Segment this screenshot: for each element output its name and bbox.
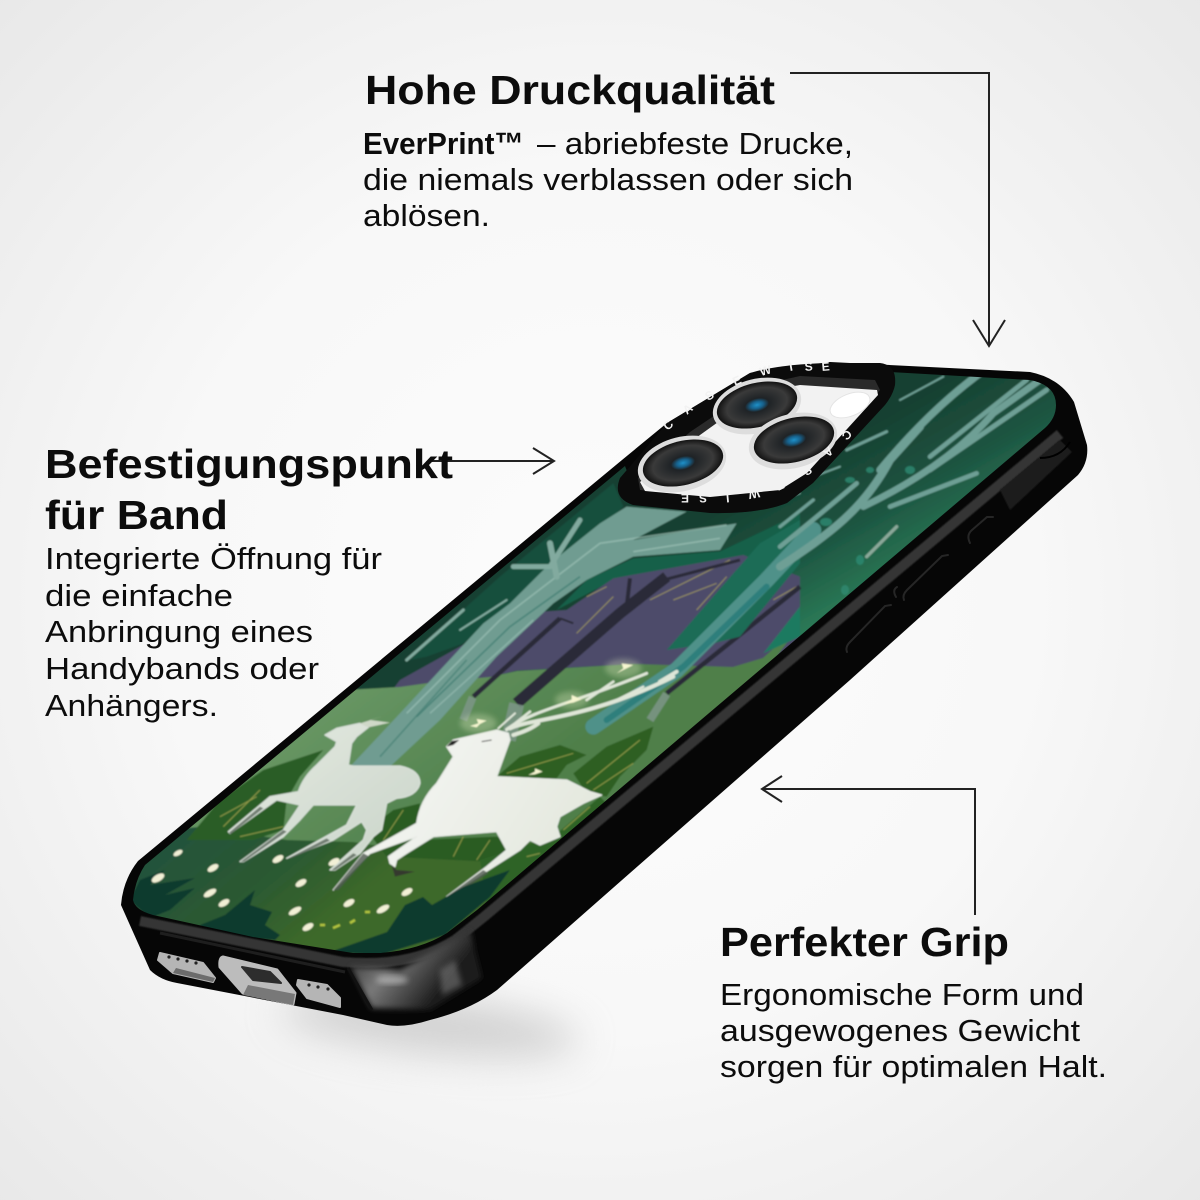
glowing sparkles <box>460 659 642 775</box>
small left branches <box>407 520 580 660</box>
camera white plate <box>640 385 878 497</box>
text: strap attachment description <box>45 541 382 723</box>
heading: strap attachment: Befestigungspunkt <box>45 441 453 487</box>
printed artwork: forest with deer <box>133 372 1056 953</box>
canopy dark patch <box>410 483 623 660</box>
forest background <box>356 372 1056 690</box>
text: grip description: Ergonomische Form und <box>720 977 1084 1012</box>
text: strap attachment description: Anbringung eines <box>45 614 313 649</box>
main grey-teal tree <box>350 507 737 767</box>
antlers <box>498 672 677 735</box>
text: print quality description: ablösen. <box>363 198 490 233</box>
green bushes <box>187 727 653 903</box>
dark trunks <box>473 560 800 703</box>
meadow field <box>188 642 787 846</box>
text: print quality description: EverPrint™ <box>363 126 524 161</box>
text: grip description: ausgewogenes Gewicht <box>720 1013 1080 1048</box>
foreground bushes <box>130 870 510 955</box>
side buttons <box>846 517 993 652</box>
case edge highlights <box>140 434 1072 1010</box>
left deer <box>228 723 420 870</box>
text: strap attachment description: Handybands oder <box>45 651 319 686</box>
yellow twigs <box>576 559 796 634</box>
text: print quality description: – abriebfeste Drucke, <box>537 126 853 161</box>
text: strap attachment description: Integrierte Öffnung für <box>45 541 382 576</box>
bottom ports <box>158 953 340 1007</box>
text: strap attachment description: Anhängers. <box>45 688 218 723</box>
deer, bushes and antlers <box>187 659 677 903</box>
trunk bases <box>463 694 667 740</box>
ring lettering: CASEWISE <box>681 427 855 505</box>
canopy green band <box>557 513 800 610</box>
phone shadow <box>278 981 582 1069</box>
heading: print quality: Hohe Druckqualität <box>365 67 775 113</box>
foliage dots <box>820 465 916 595</box>
ring lettering <box>660 359 855 505</box>
lens: right <box>743 404 843 478</box>
case body <box>121 362 1087 1026</box>
heading: strap attachment <box>45 441 453 538</box>
ground <box>134 826 532 953</box>
grass highlights <box>320 912 370 928</box>
arrow: print quality <box>790 73 1005 346</box>
far forest layers <box>390 483 800 693</box>
camera module <box>618 359 895 513</box>
text: print quality description <box>363 126 853 233</box>
ring lettering: CASEWISE <box>660 359 830 433</box>
heading: strap attachment: für Band <box>45 492 228 538</box>
right teal tree <box>593 530 813 727</box>
lens: top <box>707 369 807 443</box>
flash <box>826 387 874 423</box>
arrow: strap attachment <box>430 448 554 474</box>
camera ring inner shadow <box>638 376 880 497</box>
camera ring <box>618 363 895 513</box>
text: grip description: sorgen für optimalen Halt. <box>720 1049 1107 1084</box>
trunk streaks <box>380 525 727 757</box>
heading: grip: Perfekter Grip <box>720 919 1009 965</box>
upper tree branches <box>780 373 1047 567</box>
white flowers <box>150 848 414 933</box>
text: print quality description: die niemals verblassen oder sich <box>363 162 853 197</box>
right tree leaves <box>667 520 800 650</box>
arrow: grip <box>762 776 975 915</box>
phone case illustration <box>100 350 1100 1026</box>
text: grip description <box>720 977 1107 1084</box>
tree layers <box>350 507 813 767</box>
purple dusk band <box>390 555 800 693</box>
right deer <box>333 730 602 897</box>
lens: left <box>632 427 732 501</box>
text: strap attachment description: die einfache <box>45 578 233 613</box>
